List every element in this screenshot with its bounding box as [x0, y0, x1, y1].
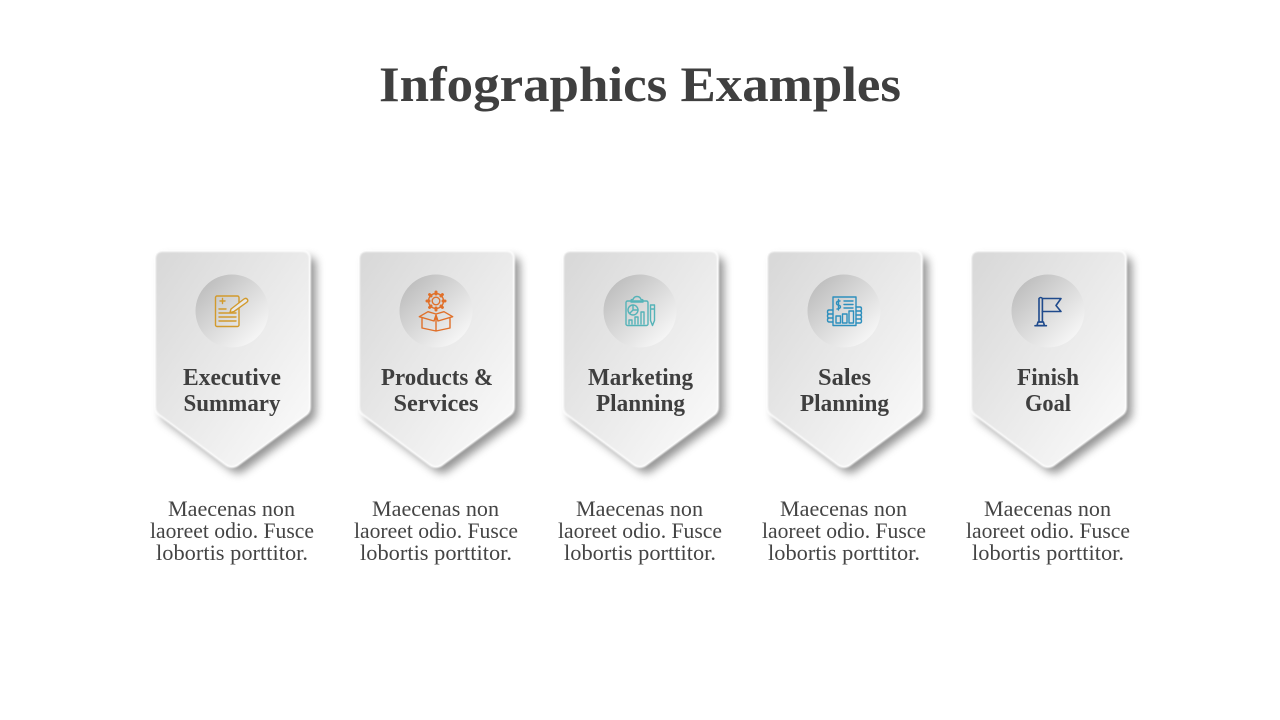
text block: sales planning — [762, 496, 926, 565]
text block: executive summary: laoreet odio. Fusce — [150, 518, 314, 543]
text block: marketing planning: laoreet odio. Fusce — [558, 518, 722, 543]
panel: executive summary — [155, 251, 316, 473]
icon: flag — [1035, 298, 1061, 326]
panel: finish goal — [971, 251, 1132, 473]
heading: marketing planning: Marketing — [588, 365, 693, 391]
heading: sales planning: Planning — [800, 391, 889, 417]
heading: marketing planning: Planning — [596, 391, 685, 417]
text block: marketing planning: lobortis porttitor. — [564, 540, 716, 565]
heading: marketing planning — [588, 365, 693, 417]
text block: products and services: Maecenas non — [372, 496, 499, 521]
heading: finish goal: Finish — [1017, 365, 1079, 391]
heading: executive summary — [183, 365, 281, 417]
icon: invoice with coins — [828, 297, 862, 326]
heading: products and services — [381, 365, 493, 417]
text block: sales planning: laoreet odio. Fusce — [762, 518, 926, 543]
panel: sales planning — [767, 251, 928, 473]
text block: marketing planning: Maecenas non — [576, 496, 703, 521]
text block: sales planning: lobortis porttitor. — [768, 540, 920, 565]
heading: products and services: Services — [394, 391, 478, 417]
text block: finish goal: Maecenas non — [984, 496, 1111, 521]
icon: gear and box — [419, 292, 453, 331]
text block: executive summary: lobortis porttitor. — [156, 540, 308, 565]
heading: executive summary: Executive — [183, 365, 281, 391]
text block: finish goal: laoreet odio. Fusce — [966, 518, 1130, 543]
heading: sales planning: Sales — [818, 365, 871, 391]
text block: products and services — [354, 496, 518, 565]
icon: clipboard with charts — [626, 296, 654, 326]
text block: finish goal — [966, 496, 1130, 565]
text block: products and services: laoreet odio. Fusce — [354, 518, 518, 543]
heading: products and services: Products & — [381, 365, 493, 391]
text block: executive summary: Maecenas non — [168, 496, 295, 521]
heading: sales planning — [800, 365, 889, 417]
heading: executive summary: Summary — [184, 391, 280, 417]
text block: marketing planning — [558, 496, 722, 565]
text block: sales planning: Maecenas non — [780, 496, 907, 521]
panel: marketing planning — [563, 251, 724, 473]
heading: finish goal: Goal — [1025, 391, 1071, 417]
title: Infographics Examples — [379, 56, 901, 112]
panel: products and services — [359, 251, 520, 473]
icon: document and pen — [216, 296, 248, 326]
text block: products and services: lobortis porttitor. — [360, 540, 512, 565]
text block: executive summary — [150, 496, 314, 565]
heading: finish goal — [1017, 365, 1079, 417]
text block: finish goal: lobortis porttitor. — [972, 540, 1124, 565]
